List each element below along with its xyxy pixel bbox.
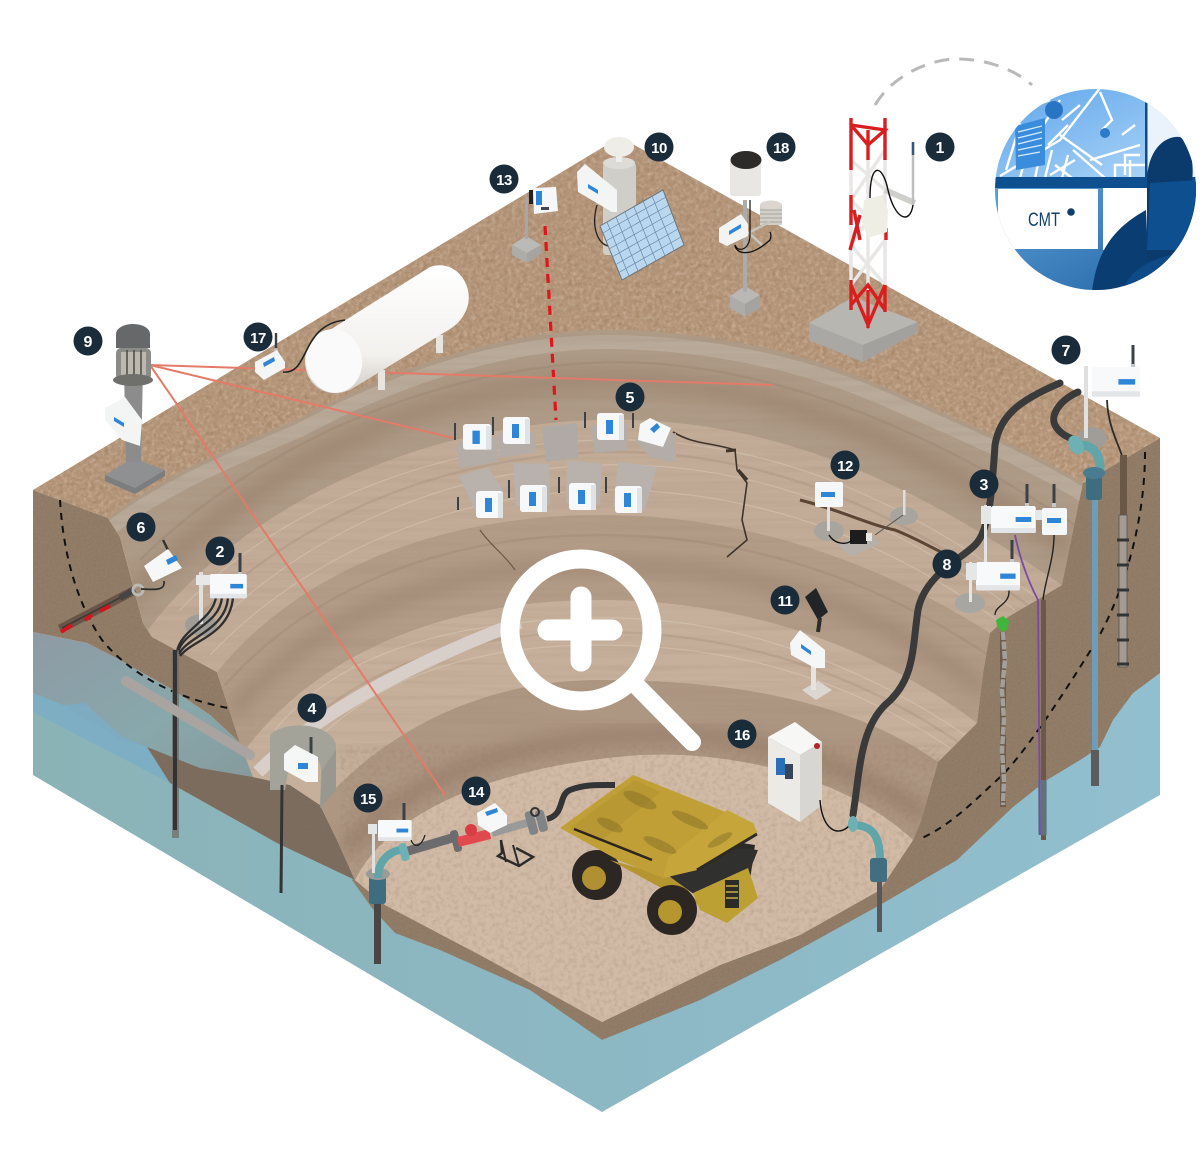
magnifier icon: [510, 559, 692, 742]
badge 6: 6: [137, 520, 146, 537]
badge 15: 15: [360, 791, 376, 808]
badge 16: 16: [734, 727, 750, 744]
badge 12: [830, 450, 860, 480]
badge 15: [354, 784, 382, 812]
badge 5: [616, 382, 644, 412]
badge 1: 1: [936, 140, 945, 157]
badge 8: [932, 550, 962, 578]
sensor 6: tilt and extensometer: [60, 540, 182, 632]
badge 4: [298, 694, 326, 722]
badge 2: 2: [216, 544, 225, 561]
layer: water table band: [33, 632, 253, 783]
sensor 1: radio tower: [809, 118, 918, 362]
sensor 8: chain inclinometer logger: [955, 540, 1020, 807]
badge 6: [126, 512, 156, 542]
badge 18: [766, 132, 796, 162]
radio link arc: [875, 59, 1032, 105]
badge 11: [770, 586, 800, 614]
badge 9: [74, 326, 102, 356]
badge 16: [728, 720, 756, 748]
strata texture: [378, 339, 938, 668]
badge 1: [926, 132, 954, 162]
badge 7: [1052, 336, 1080, 364]
sensor 5: geotechnical logger array: [455, 412, 676, 518]
floor: [355, 754, 913, 1022]
bench 1: [148, 420, 1062, 722]
pit floor pipeline: [366, 785, 615, 964]
badge 13: 13: [496, 172, 512, 189]
badge 5: 5: [626, 390, 635, 407]
sensor 12: crackmeter: [800, 482, 950, 557]
slope failure crack: [480, 432, 747, 570]
sensor 11: stand with solar panel: [790, 588, 832, 700]
CMT logo: CMT: [1028, 210, 1060, 231]
solar panel: [600, 190, 684, 280]
sensor 17: tank level logger: [255, 320, 345, 380]
badge 9: 9: [84, 334, 93, 351]
dashed slope failure line left: [60, 500, 228, 708]
sensor: floor standpipe right: [848, 816, 887, 932]
badge 11: 11: [778, 593, 793, 610]
badge 3: [970, 470, 998, 498]
sensor 10: GNSS pillar and solar panel: [577, 137, 684, 280]
sensor 4: weir flow logger: [270, 725, 336, 893]
laser link: [545, 226, 556, 420]
sensor 7: standpipe and in-place inclinometer: [1065, 345, 1140, 786]
badge 13: [490, 164, 518, 194]
strata streaks: [180, 440, 1040, 765]
pit: stepped benches: [108, 330, 1083, 1022]
badge 2: [206, 536, 234, 566]
haul truck: [560, 775, 758, 935]
sensor 9: scanning station: [105, 324, 165, 494]
badge 18: 18: [773, 140, 789, 157]
road gutter: [258, 622, 520, 772]
badge 4: 4: [308, 701, 317, 718]
sensor 14: flow meter logger: [477, 803, 507, 833]
laser scan lines: [150, 365, 773, 795]
dark strata streaks: [203, 451, 1028, 742]
badge 17: [244, 322, 272, 352]
badge 17: 17: [250, 330, 266, 347]
top surface: desert ground: [33, 137, 1160, 518]
dashed slope failure line right: [922, 452, 1145, 838]
badge 12: 12: [837, 458, 853, 475]
block: brown soil cut faces: [33, 438, 1160, 1040]
sensor 2: multi-channel piezometer logger: [172, 553, 247, 838]
sensor 16: control cabinet: [768, 722, 850, 831]
main data cable: [853, 383, 1060, 815]
sensor 18: weather station: [719, 151, 782, 317]
badge 10: [644, 132, 674, 162]
badge 14: [462, 776, 490, 806]
badge 7: 7: [1062, 343, 1071, 360]
secondary cable: [1054, 392, 1080, 442]
bench 2: [246, 600, 977, 805]
photo: control room: [995, 89, 1196, 290]
sensor 3: dual loggers with piezometers: [981, 484, 1067, 840]
badge 3: 3: [980, 477, 989, 494]
sensor 15: well logger: [368, 803, 425, 873]
face 3: [321, 680, 938, 880]
fuel tank: [301, 265, 469, 397]
face 2: [217, 515, 990, 761]
block: groundwater base: [33, 632, 1160, 1112]
horizontal drain pipe: [126, 681, 250, 755]
badge 14: 14: [468, 784, 485, 801]
badge 8: 8: [943, 557, 952, 574]
sensor 13: prism on concrete block: [512, 187, 558, 263]
badge 10: 10: [651, 140, 667, 157]
